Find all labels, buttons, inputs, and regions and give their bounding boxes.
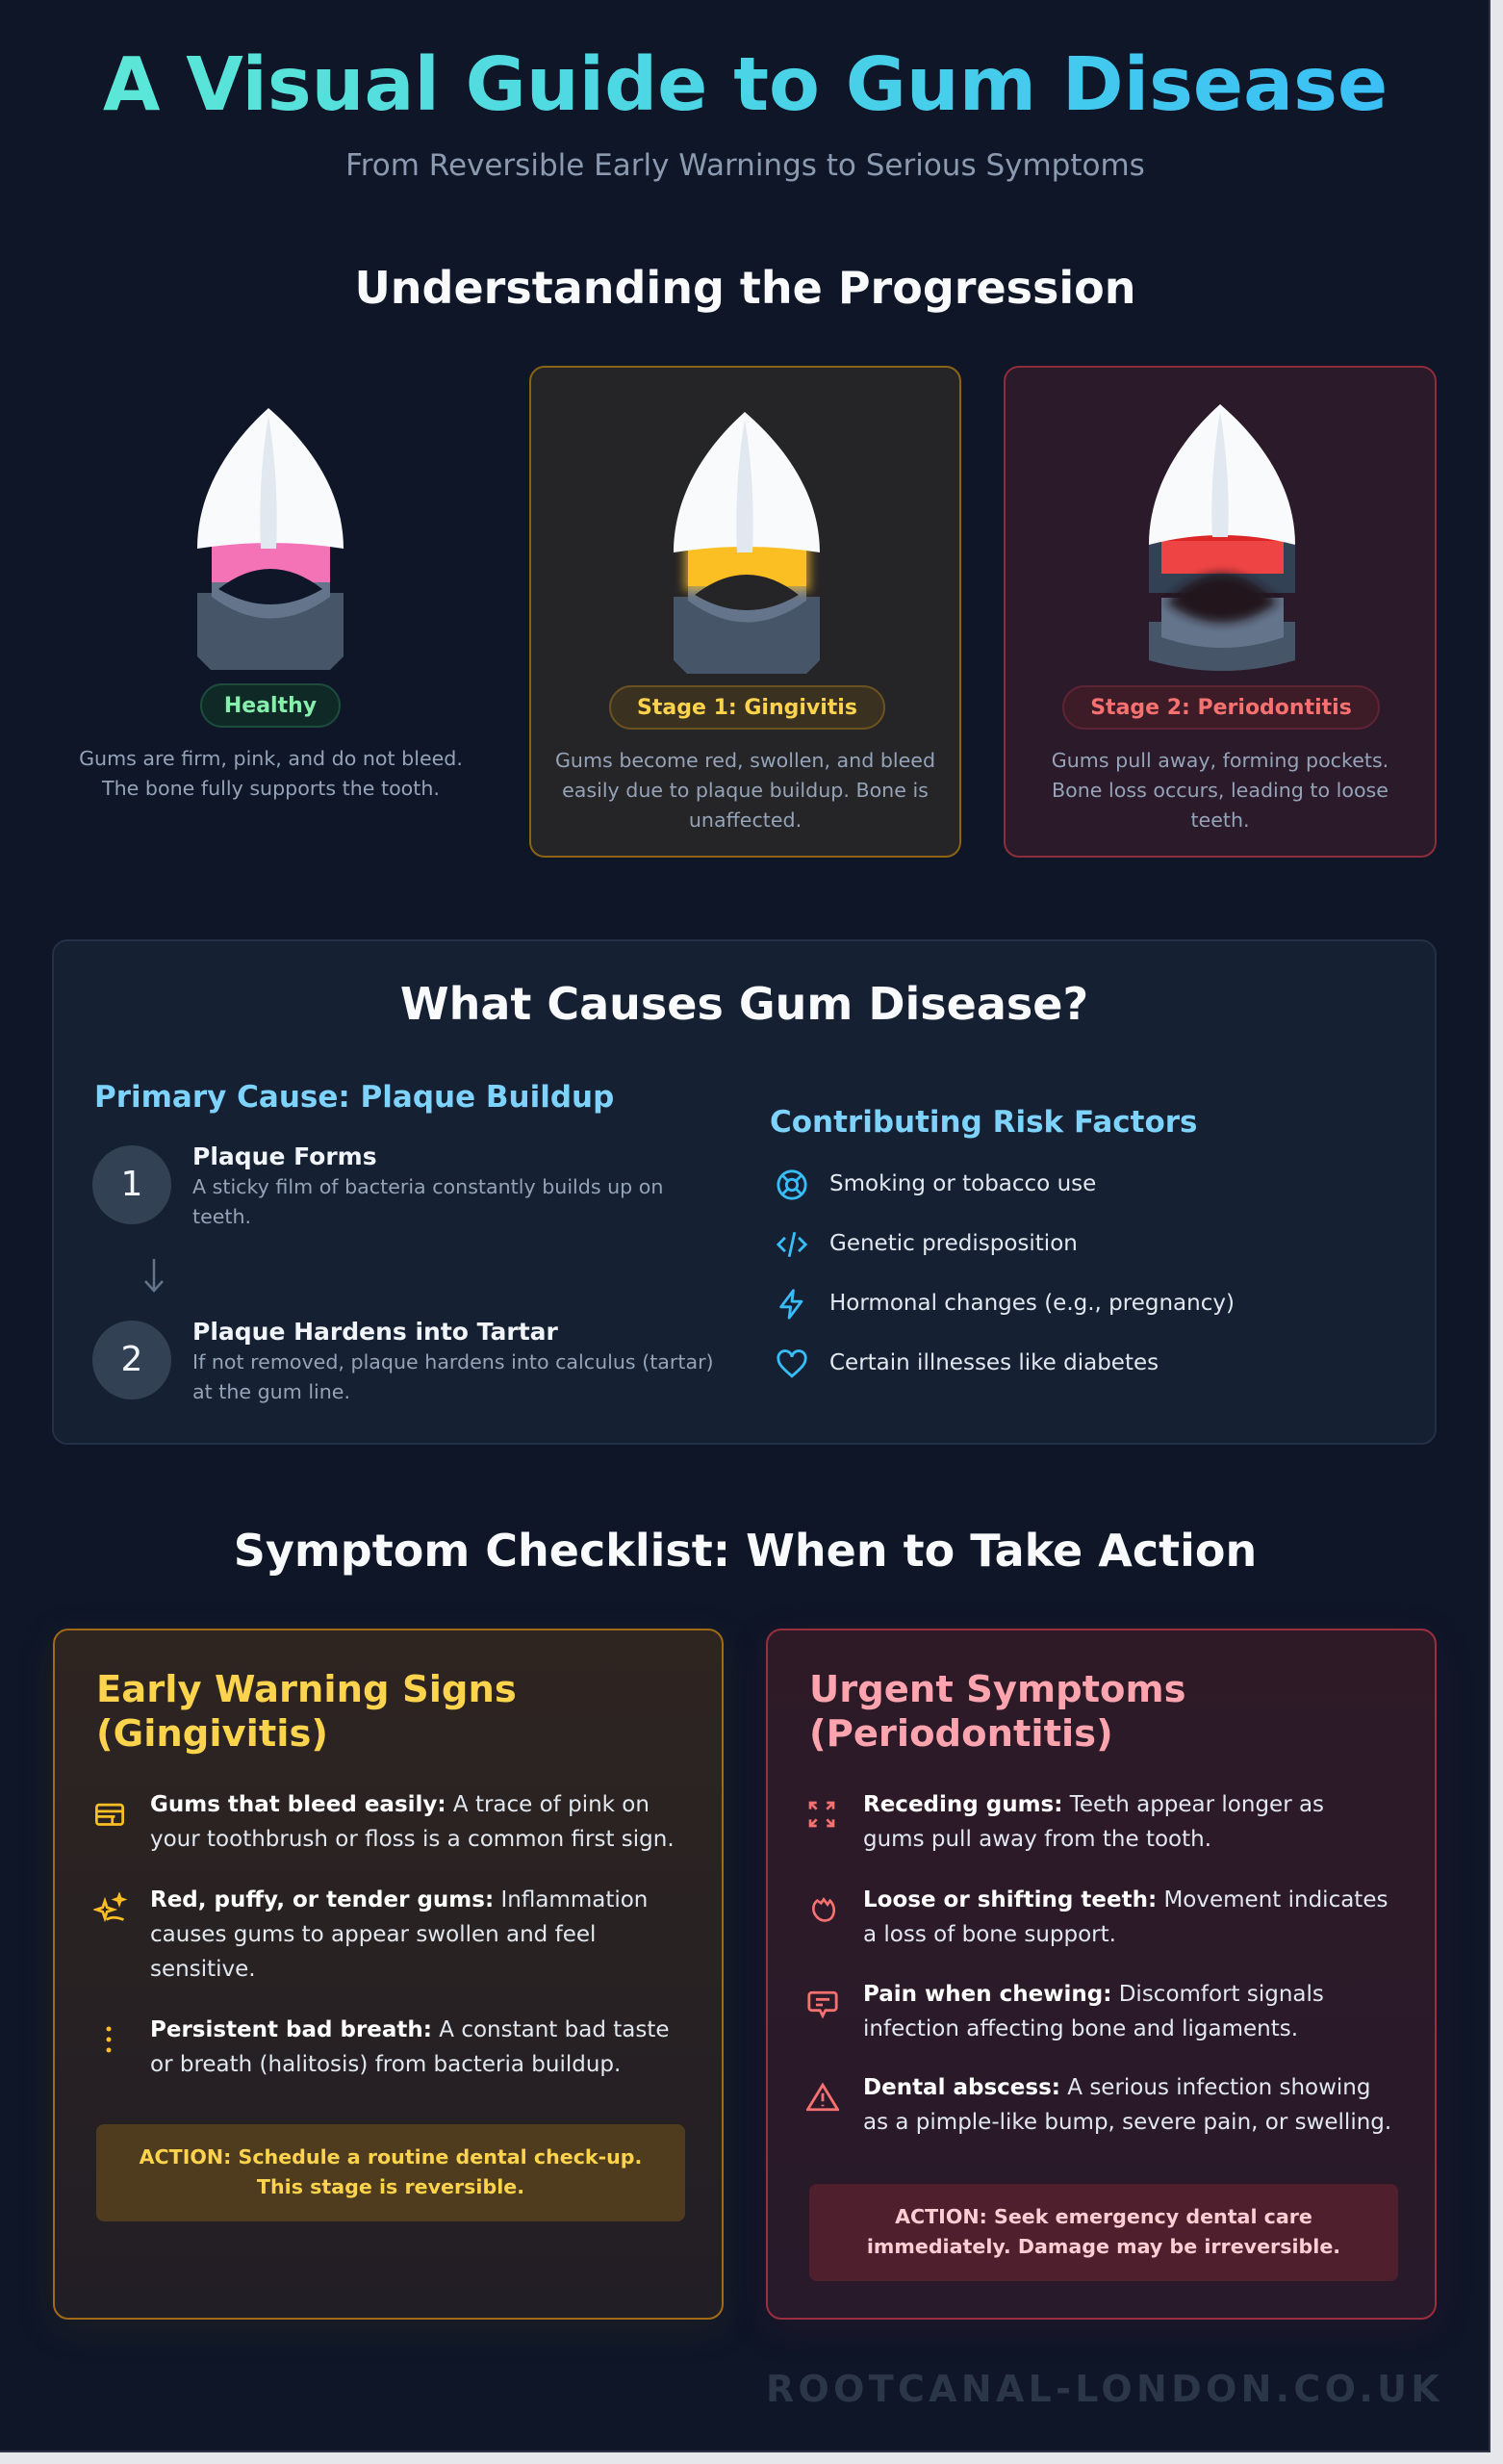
text: stage 1 description: unaffected. bbox=[689, 808, 802, 832]
item: abscess: Dental abscess: A serious infection showing bbox=[863, 2075, 1370, 2100]
subheading: risk factors: Contributing Risk Factors bbox=[770, 1105, 1197, 1140]
subheading: primary cause: Primary Cause: Plaque Buildup bbox=[94, 1080, 614, 1115]
badge: healthy bbox=[200, 683, 341, 728]
text: stage 2 description: Gums pull away, forming pockets. bbox=[1052, 749, 1388, 772]
icon: genetics bbox=[776, 1232, 808, 1257]
item: receding gums bbox=[808, 1792, 1324, 1852]
callout: action emergency: ACTION: Seek emergency dental care bbox=[895, 2205, 1312, 2228]
subtitle: From Reversible Early Warnings to Serious Symptoms bbox=[345, 148, 1145, 183]
item: loose teeth: a loss of bone support. bbox=[863, 1922, 1116, 1947]
item: loose teeth bbox=[812, 1887, 1388, 1947]
item: red puffy gums bbox=[93, 1887, 648, 1982]
item: bleeding gums bbox=[95, 1792, 675, 1852]
step 2 text: at the gum line. bbox=[192, 1380, 350, 1403]
badge: stage 2 bbox=[1062, 685, 1380, 730]
item: red puffy gums: sensitive. bbox=[150, 1957, 256, 1982]
icon: heart bbox=[777, 1349, 807, 1378]
panel: healthy stage bbox=[79, 408, 463, 800]
item: bleeding gums: your toothbrush or floss is a common first sign. bbox=[150, 1827, 675, 1852]
circle 2: 2 bbox=[121, 1340, 142, 1379]
item: abscess bbox=[806, 2075, 1391, 2135]
heading: urgent: (Periodontitis) bbox=[809, 1712, 1113, 1756]
badge: stage 1: Stage 1: Gingivitis bbox=[637, 696, 857, 720]
title: A Visual Guide to Gum Disease bbox=[103, 42, 1388, 128]
callout: action schedule: ACTION: Schedule a routine dental check-up. bbox=[140, 2145, 642, 2169]
item: receding gums: gums pull away from the tooth. bbox=[863, 1827, 1211, 1852]
badge: stage 1 bbox=[609, 685, 885, 730]
heading: urgent: Urgent Symptoms bbox=[809, 1668, 1186, 1711]
heading: progression: Understanding the Progression bbox=[354, 262, 1136, 314]
item: receding gums: Receding gums: Teeth appear longer as bbox=[863, 1792, 1324, 1817]
step 2 text: If not removed, plaque hardens into calculus (tartar) bbox=[192, 1350, 714, 1373]
icon: healthy tooth bbox=[197, 408, 344, 670]
icon: periodontitis tooth bbox=[1149, 404, 1295, 671]
badge: healthy: Healthy bbox=[224, 694, 317, 718]
arrow: down bbox=[144, 1259, 164, 1293]
item: red puffy gums: causes gums to appear swollen and feel bbox=[150, 1922, 596, 1947]
icon: gingivitis tooth bbox=[674, 412, 820, 674]
item: loose teeth: Loose or shifting teeth: Movement indicates bbox=[863, 1887, 1388, 1912]
callout: action schedule bbox=[96, 2124, 685, 2221]
item: bad breath: or breath (halitosis) from bacteria buildup. bbox=[150, 2052, 621, 2077]
item: pain chewing: Pain when chewing: Discomfort signals bbox=[863, 1982, 1324, 2007]
icon: tooth outline bbox=[812, 1897, 835, 1922]
footer: website: ROOTCANAL-LONDON.CO.UK bbox=[766, 2368, 1443, 2410]
icon: warning bbox=[806, 2083, 839, 2112]
circle 1 bbox=[92, 1145, 171, 1224]
icon: hormones bbox=[779, 1289, 802, 1320]
badge: stage 2: Stage 2: Periodontitis bbox=[1090, 696, 1352, 720]
circle 2 bbox=[92, 1321, 171, 1399]
step 1 text: Plaque Forms bbox=[192, 1142, 377, 1170]
text: stage 1 description: Gums become red, swollen, and bleed bbox=[555, 749, 935, 772]
callout: action emergency bbox=[809, 2184, 1398, 2281]
list: risk factors: Hormonal changes (e.g., pregnancy) bbox=[829, 1291, 1235, 1316]
item: abscess: as a pimple-like bump, severe pain, or swelling. bbox=[863, 2110, 1391, 2135]
icon: smoking bbox=[777, 1169, 807, 1200]
text: stage 1 description bbox=[555, 749, 935, 832]
item: bleeding gums: Gums that bleed easily: A trace of pink on bbox=[150, 1792, 650, 1817]
heading: causes: What Causes Gum Disease? bbox=[400, 978, 1088, 1030]
step 1 bbox=[92, 1142, 663, 1228]
panel: causes bbox=[52, 939, 1437, 1445]
step 2 text bbox=[192, 1318, 714, 1403]
list: risk factors: Certain illnesses like diabetes bbox=[829, 1350, 1159, 1375]
panel: stage 1 gingivitis bbox=[529, 366, 961, 858]
heading: urgent bbox=[809, 1668, 1186, 1756]
panel: early warning signs bbox=[53, 1629, 724, 2320]
item: red puffy gums: Red, puffy, or tender gums: Inflammation bbox=[150, 1887, 648, 1912]
step 2 bbox=[92, 1318, 714, 1403]
text: stage 2 description bbox=[1052, 749, 1388, 832]
heading: early warning: Early Warning Signs bbox=[96, 1668, 517, 1711]
panel: urgent symptoms bbox=[766, 1629, 1437, 2320]
icon: speech bubble bbox=[807, 1990, 838, 2019]
panel: stage 2 periodontitis bbox=[1004, 366, 1437, 858]
list: risk factors: Smoking or tobacco use bbox=[829, 1171, 1096, 1196]
heading: early warning bbox=[96, 1668, 517, 1756]
text: healthy description: The bone fully supports the tooth. bbox=[102, 777, 440, 800]
step 1 text: teeth. bbox=[192, 1205, 251, 1228]
item: pain chewing: infection affecting bone and ligaments. bbox=[863, 2016, 1298, 2041]
icon: sparkle bbox=[93, 1892, 127, 1922]
step 1 text bbox=[192, 1142, 663, 1228]
list: risk factors bbox=[776, 1169, 1235, 1378]
circle 1: 1 bbox=[121, 1165, 142, 1204]
callout: action schedule: This stage is reversible. bbox=[257, 2175, 524, 2198]
text: healthy description: Gums are firm, pink, and do not bleed. bbox=[79, 747, 463, 770]
icon: card bbox=[95, 1804, 124, 1826]
item: pain chewing bbox=[807, 1982, 1324, 2041]
icon: expand bbox=[808, 1802, 835, 1827]
text: stage 1 description: easily due to plaque buildup. Bone is bbox=[562, 779, 929, 802]
step 1 text: A sticky film of bacteria constantly builds up on bbox=[192, 1175, 663, 1198]
text: stage 2 description: Bone loss occurs, leading to loose bbox=[1052, 779, 1388, 802]
text: stage 2 description: teeth. bbox=[1190, 808, 1250, 832]
heading: symptom checklist: Symptom Checklist: When to Take Action bbox=[234, 1525, 1257, 1577]
list: risk factors: Genetic predisposition bbox=[829, 1231, 1078, 1256]
icon: dots bbox=[106, 2027, 112, 2052]
item: bad breath bbox=[106, 2017, 670, 2077]
item: bad breath: Persistent bad breath: A constant bad taste bbox=[150, 2017, 670, 2042]
text: healthy description bbox=[79, 747, 463, 800]
callout: action emergency: immediately. Damage may be irreversible. bbox=[867, 2235, 1340, 2258]
step 2 text: Plaque Hardens into Tartar bbox=[192, 1318, 558, 1346]
heading: early warning: (Gingivitis) bbox=[96, 1712, 328, 1756]
